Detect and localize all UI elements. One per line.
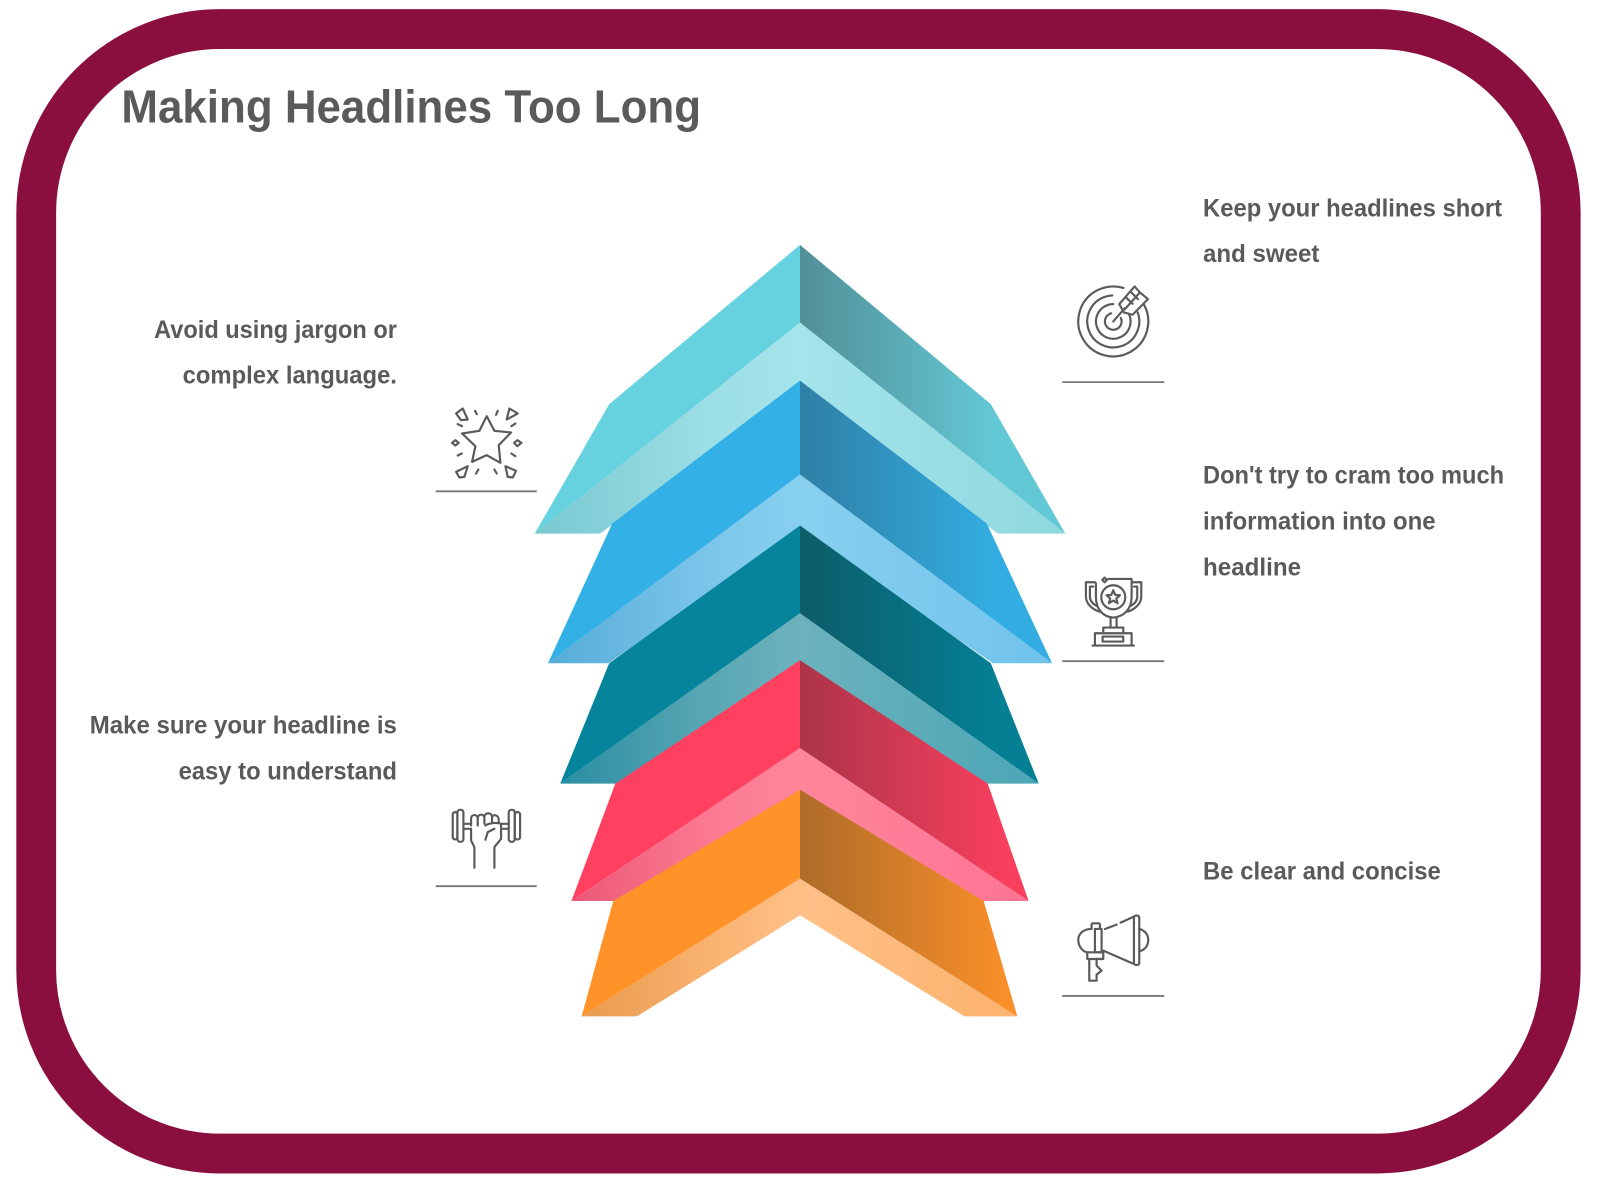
text: keep headlines short: and sweet — [1203, 240, 1320, 268]
text: don't cram: headline — [1203, 554, 1301, 582]
divider: trophy — [1062, 660, 1164, 662]
text: keep headlines short: Keep your headlines short — [1203, 194, 1503, 222]
layer 4: red chevron — [571, 660, 1029, 901]
divider: megaphone — [1062, 995, 1164, 997]
text: keep headlines short — [1203, 194, 1503, 268]
text: avoid jargon: Avoid using jargon or — [154, 316, 397, 344]
layer 1: teal chevron — [535, 245, 1065, 534]
text: don't cram — [1203, 462, 1504, 582]
text: avoid jargon — [154, 316, 397, 390]
text: avoid jargon: complex language. — [183, 362, 397, 390]
layer 2: blue chevron — [548, 381, 1052, 663]
icon: star with sparkles — [452, 408, 521, 478]
text: easy to understand — [90, 712, 397, 786]
text: don't cram: information into one — [1203, 508, 1436, 536]
layer 5: orange chevron — [582, 790, 1017, 1016]
text: easy to understand: easy to understand — [179, 758, 397, 786]
title: Making Headlines Too Long — [121, 80, 701, 132]
text: don't cram: Don't try to cram too much — [1203, 462, 1504, 490]
layer 3: dark teal chevron — [560, 526, 1039, 784]
icon: fist with dumbbell — [453, 810, 520, 868]
icon: trophy — [1086, 578, 1141, 646]
divider: dumbbell — [436, 885, 537, 887]
divider: target — [1062, 381, 1164, 383]
text: clear and concise: Be clear and concise — [1203, 858, 1441, 886]
arrow stack: five chevron layers — [535, 245, 1065, 1016]
icon: megaphone — [1078, 916, 1148, 981]
text: easy to understand: Make sure your headline is — [90, 712, 397, 740]
icon: target with arrow — [1065, 274, 1161, 369]
divider: star — [436, 490, 537, 492]
